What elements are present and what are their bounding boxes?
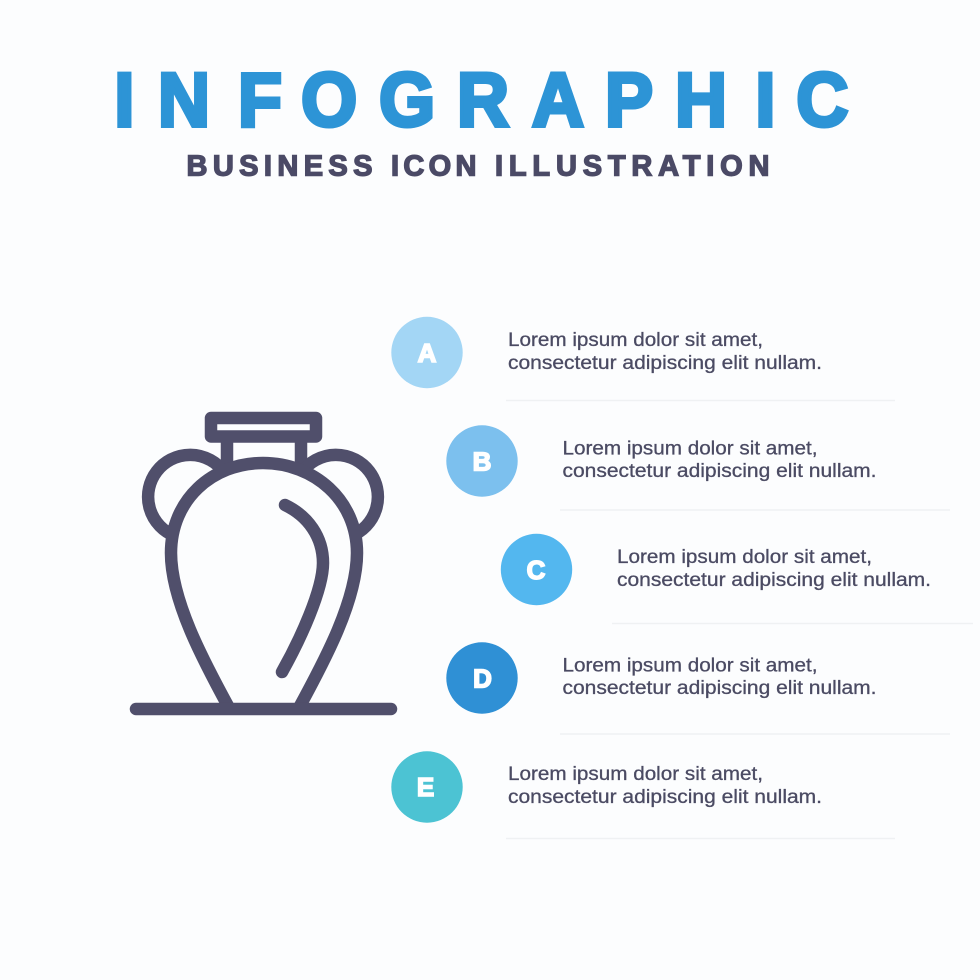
text B: consectetur adipiscing elit nullam. bbox=[562, 461, 876, 482]
text D: Lorem ipsum dolor sit amet, bbox=[562, 656, 818, 676]
text C: consectetur adipiscing elit nullam. bbox=[617, 570, 931, 591]
badge D bbox=[446, 642, 518, 714]
text D bbox=[562, 656, 876, 699]
text E: consectetur adipiscing elit nullam. bbox=[508, 787, 822, 808]
badge E: E bbox=[417, 772, 434, 802]
item C bbox=[501, 534, 973, 624]
badge C bbox=[501, 534, 572, 605]
text C: Lorem ipsum dolor sit amet, bbox=[617, 547, 872, 568]
text E bbox=[508, 764, 822, 808]
subtitle: ICON bbox=[391, 150, 476, 182]
text A: Lorem ipsum dolor sit amet, bbox=[508, 330, 763, 351]
item B bbox=[446, 425, 950, 510]
text B bbox=[562, 438, 876, 482]
badge B: B bbox=[473, 446, 491, 476]
subtitle bbox=[186, 150, 770, 182]
badge B bbox=[446, 425, 518, 497]
text B: Lorem ipsum dolor sit amet, bbox=[562, 438, 818, 460]
badge D: D bbox=[473, 664, 492, 694]
subtitle: BUSINESS bbox=[186, 150, 372, 182]
text A bbox=[508, 330, 822, 374]
text A: consectetur adipiscing elit nullam. bbox=[508, 353, 822, 374]
badge A bbox=[391, 317, 463, 388]
icon: amphora vase bbox=[136, 418, 391, 709]
text E: Lorem ipsum dolor sit amet, bbox=[508, 764, 763, 785]
title: INFOGRAPHIC bbox=[114, 57, 848, 142]
item A bbox=[391, 317, 895, 400]
text D: consectetur adipiscing elit nullam. bbox=[562, 678, 876, 699]
badge A: A bbox=[418, 338, 437, 368]
badge C: C bbox=[527, 555, 546, 585]
subtitle: ILLUSTRATION bbox=[495, 150, 770, 182]
item E bbox=[391, 751, 895, 838]
badge E bbox=[391, 751, 463, 823]
item D bbox=[446, 642, 950, 734]
text C bbox=[617, 547, 931, 591]
